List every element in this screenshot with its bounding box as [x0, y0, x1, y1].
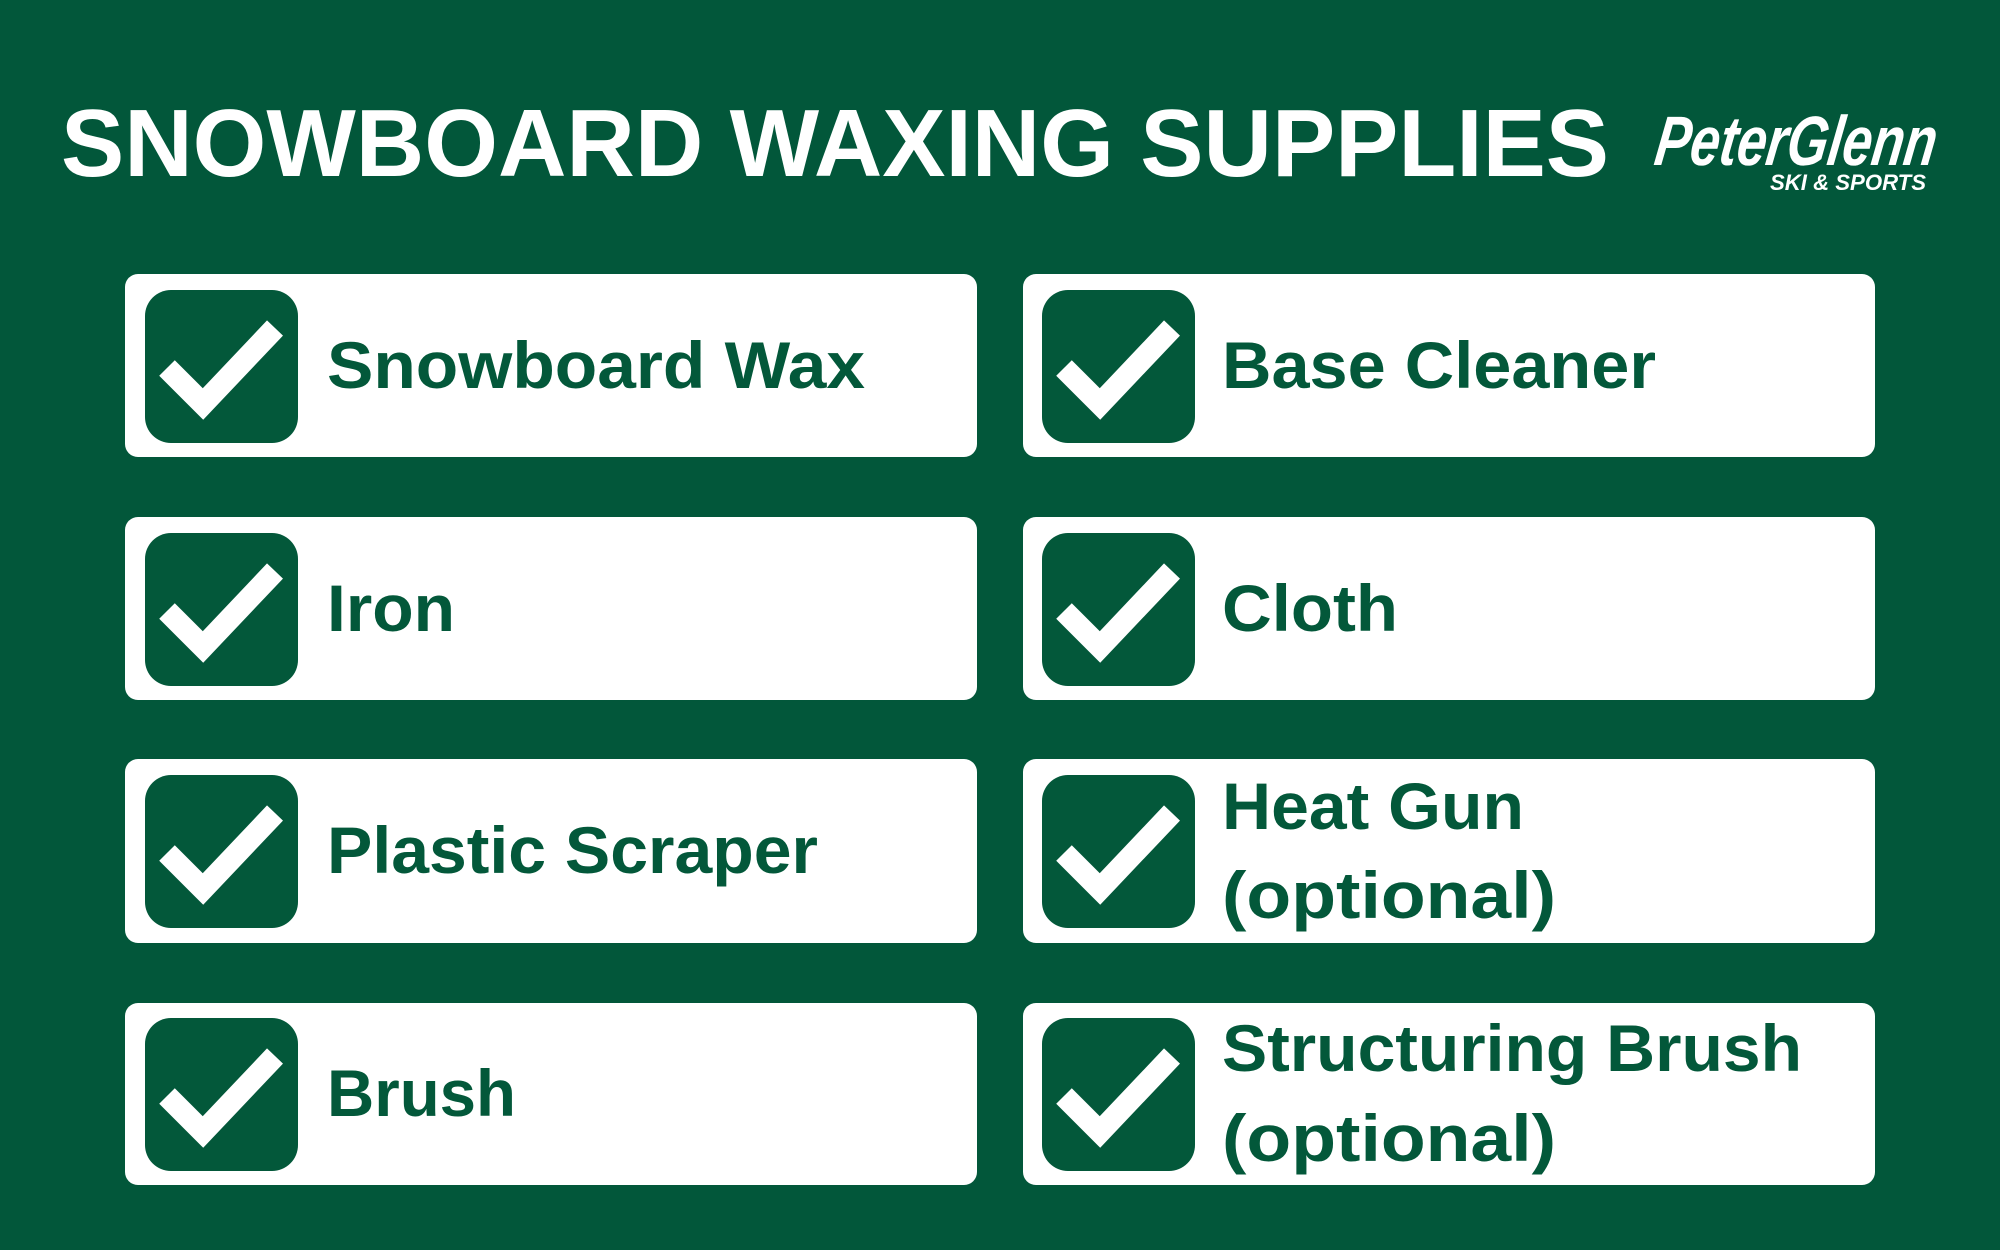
card: Brush: Brush: [327, 1056, 516, 1130]
card: Heat Gun: (optional): [1222, 858, 1556, 932]
card: Heat Gun: [1023, 759, 1875, 943]
card: Structuring Brush: Structuring Brush: [1222, 1011, 1802, 1085]
logo: Peter Glenn: SKI & SPORTS: [1770, 170, 1926, 195]
card: Iron: Iron: [327, 571, 455, 645]
card: Heat Gun: Heat Gun: [1222, 769, 1524, 843]
card: Plastic Scraper: Plastic Scraper: [327, 813, 818, 887]
card: Base Cleaner: Base Cleaner: [1222, 328, 1656, 402]
card: Snowboard Wax: [125, 274, 977, 457]
card: Structuring Brush: [1023, 1003, 1875, 1185]
card: Cloth: Cloth: [1222, 571, 1398, 645]
card: Iron: [125, 517, 977, 700]
card: Plastic Scraper: [125, 759, 977, 943]
card: Brush: [125, 1003, 977, 1185]
card: Snowboard Wax: Snowboard Wax: [327, 328, 865, 402]
card: Base Cleaner: [1023, 274, 1875, 457]
title: SNOWBOARD WAXING SUPPLIES: [61, 90, 1609, 197]
card: Structuring Brush: (optional): [1222, 1101, 1556, 1175]
card: Cloth: [1023, 517, 1875, 700]
